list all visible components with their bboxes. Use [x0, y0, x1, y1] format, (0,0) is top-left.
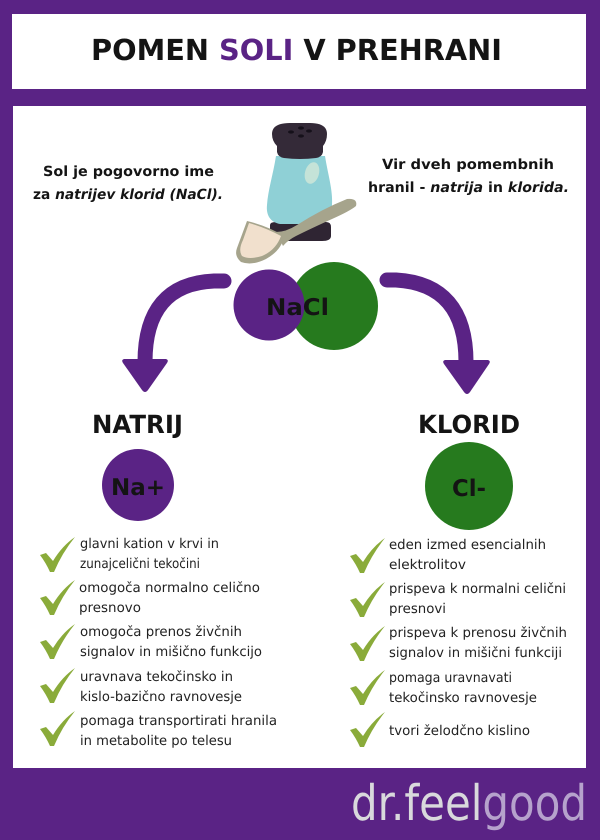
item: klorid 3: signalov in mišični funkciji	[389, 645, 562, 661]
item: klorid 2: prispeva k normalni celični	[389, 581, 566, 597]
item: klorid 3: prispeva k prenosu živčnih	[389, 625, 567, 641]
badge: Na+: Na+	[111, 475, 165, 501]
badge: Na+	[102, 449, 174, 521]
item: klorid 1	[350, 537, 546, 573]
item: natrij 2: omogoča normalno celično	[79, 580, 260, 596]
item: natrij 2: presnovo	[79, 600, 141, 616]
item: natrij 4	[40, 668, 242, 705]
list: klorid	[350, 537, 567, 747]
main panel	[13, 106, 586, 768]
item: klorid 4	[350, 670, 537, 706]
badge: Cl-	[425, 442, 513, 530]
intro text: left: Sol je pogovorno ime	[43, 164, 214, 180]
item: natrij 3	[40, 624, 262, 660]
intro text: left	[33, 164, 223, 203]
heading: klorid: KLORID	[418, 410, 520, 439]
item: klorid 5: tvori želodčno kislino	[389, 723, 530, 739]
item: natrij 5: pomaga transportirati hranila	[80, 713, 277, 729]
item: klorid 4: pomaga uravnavati	[389, 670, 512, 686]
icon: salt shaker and spoon	[236, 123, 356, 263]
item: natrij 1	[40, 536, 219, 572]
item: klorid 1: eden izmed esencialnih	[389, 537, 546, 553]
item: klorid 2	[350, 581, 566, 617]
item: natrij 4: uravnava tekočinsko in	[80, 669, 233, 685]
item: klorid 1: elektrolitov	[389, 557, 466, 573]
intro text: right	[368, 157, 569, 196]
badge: Cl-: Cl-	[452, 476, 486, 502]
item: natrij 3: omogoča prenos živčnih	[80, 624, 242, 640]
item: natrij 4: kislo-bazično ravnovesje	[80, 689, 242, 705]
logo: dr.feelgood: dr.feelgood	[351, 775, 587, 832]
item: natrij 3: signalov in mišično funkcijo	[80, 644, 262, 660]
NaCl molecule: NaCl	[266, 295, 329, 321]
item: natrij 5	[40, 711, 277, 749]
heading: natrij: NATRIJ	[92, 410, 183, 439]
intro text: right: hranil - natrija in klorida.	[368, 180, 569, 196]
item: natrij 2	[40, 580, 260, 616]
item: natrij 1: zunajcelični tekočini	[80, 556, 200, 572]
NaCl molecule	[234, 262, 378, 350]
item: klorid 5	[350, 712, 530, 747]
intro text: right: Vir dveh pomembnih	[382, 157, 554, 173]
arrow: left	[122, 281, 224, 392]
item: klorid 3	[350, 625, 567, 661]
title panel	[12, 14, 586, 89]
item: natrij 1: glavni kation v krvi in	[80, 536, 219, 552]
list: natrij	[40, 536, 277, 749]
arrow: right	[387, 280, 490, 394]
title: POMEN SOLI V PREHRANI	[91, 33, 502, 67]
item: natrij 5: in metabolite po telesu	[80, 733, 232, 749]
item: klorid 4: tekočinsko ravnovesje	[389, 690, 537, 706]
item: klorid 2: presnovi	[389, 601, 446, 617]
intro text: left: za natrijev klorid (NaCl).	[33, 187, 223, 203]
